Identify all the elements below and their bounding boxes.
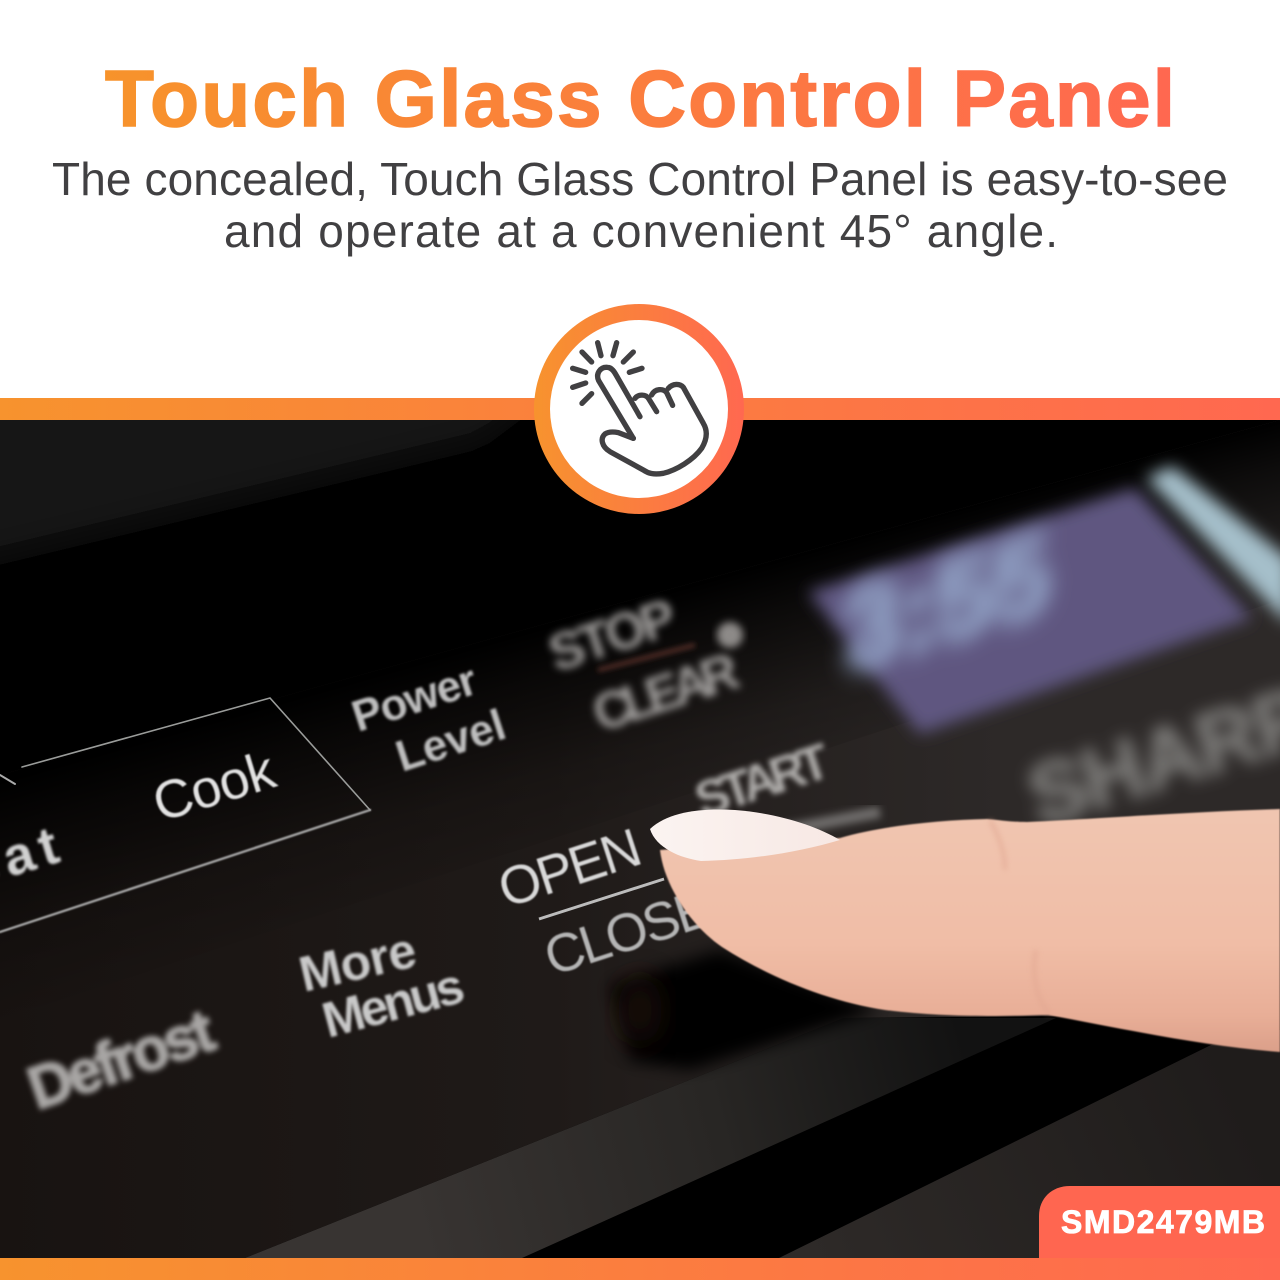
display screen: [808, 488, 1252, 734]
panel label: Power Level: Power: [346, 655, 483, 742]
finger crease: [990, 820, 1050, 1014]
panel label: Stop Clear: CLEAR: [586, 642, 746, 743]
panel label: Defrost: Defrost: [19, 996, 223, 1122]
dark grey right surface: [779, 1030, 1280, 1258]
stop clear divider: [598, 645, 695, 670]
subtitle: The concealed, Touch Glass Control Panel is easy-to-see: [52, 153, 1228, 205]
panel label: Cook: Cook: [146, 740, 283, 833]
stop clear dot: [717, 622, 743, 648]
subtitle: and operate at a convenient 45° angle.: [224, 205, 1058, 257]
panel label: Power Level: Level: [390, 700, 512, 782]
panel label: Open Close: [500, 828, 701, 972]
display light bar: [1146, 466, 1280, 625]
start underline: [760, 812, 880, 835]
open close divider: [539, 879, 664, 919]
model number badge: [1039, 1186, 1280, 1258]
panel label: Open Close: OPEN: [491, 817, 649, 919]
fingernail: [650, 810, 840, 861]
finger: [660, 809, 1280, 1052]
bottom gradient band: [0, 1258, 1280, 1280]
icon: pointing hand: [573, 343, 706, 474]
cook button outline: [0, 698, 370, 932]
icon: tap gesture badge: [534, 304, 744, 514]
lower trim strip: [245, 1018, 1056, 1258]
panel label: Open Close: CLOSE: [537, 877, 719, 987]
top gradient band: [0, 398, 1280, 420]
model number: SMD2479MB: [1061, 1204, 1265, 1240]
panel label: More Menus: Menus: [316, 957, 470, 1049]
panel label: More Menus: More: [294, 922, 421, 1003]
photo: oven control panel with finger: [0, 380, 1280, 1258]
title: Touch Glass Control Panel: [105, 54, 1175, 143]
panel label: Start: START: [688, 733, 837, 828]
control panel glass: [0, 420, 1280, 1258]
panel label: More Menus: [298, 940, 466, 1038]
panel label: Stop Clear: STOP: [542, 588, 683, 683]
panel label: Stop Clear: [545, 596, 744, 733]
panel label: Power Level: [350, 668, 507, 772]
display digits: 3:55: [841, 510, 1053, 696]
subtitle: [52, 153, 1228, 257]
